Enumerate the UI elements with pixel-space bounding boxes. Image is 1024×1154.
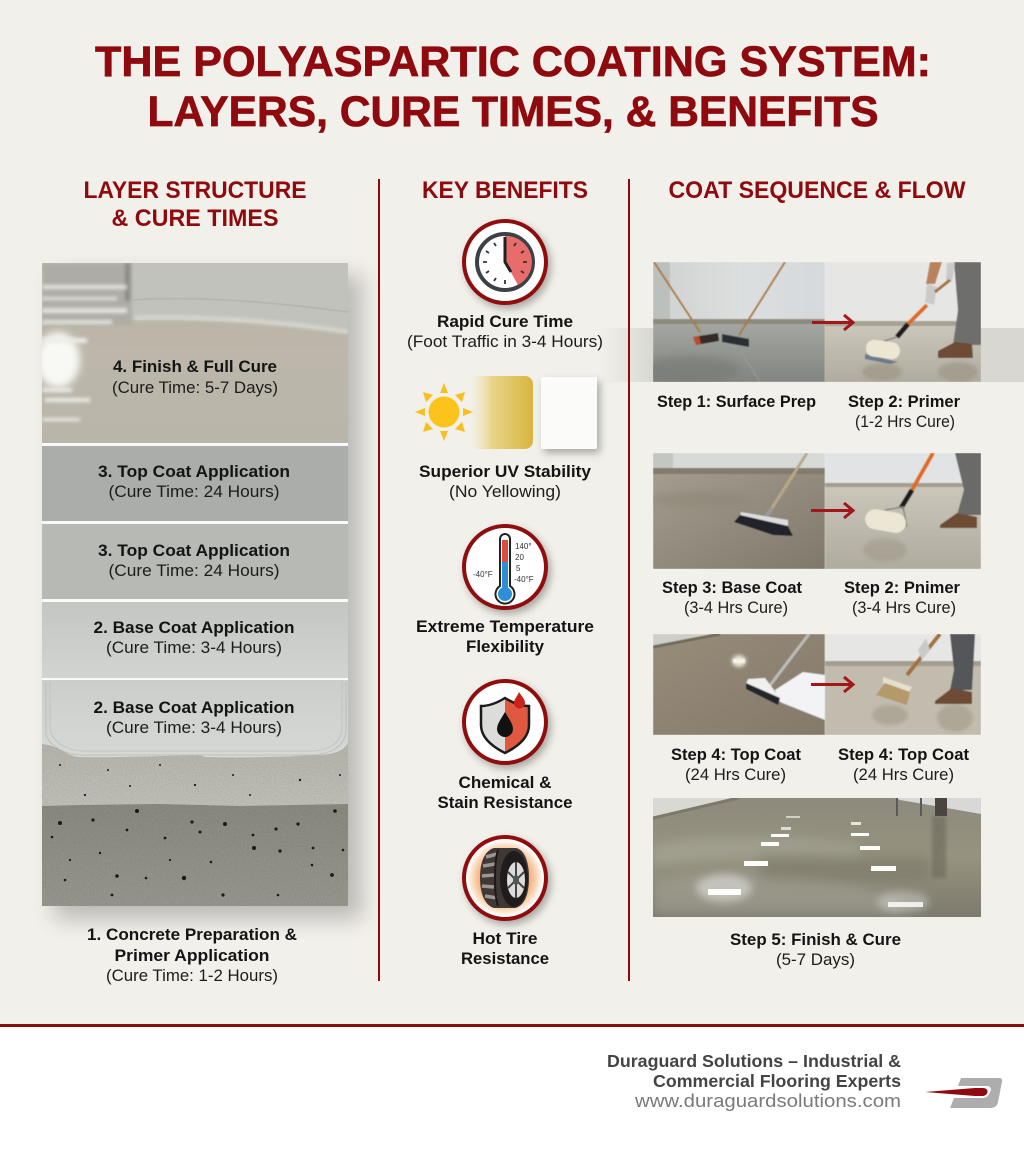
photo: base coat (650, 453, 825, 569)
icon: thermometer: 5 (516, 564, 521, 573)
caption: step 4 left (671, 745, 801, 784)
text: rapid cure: Rapid Cure Time (437, 312, 573, 331)
title: THE POLYASPARTIC COATING SYSTEM: (95, 38, 931, 86)
icon: chemical shield (464, 681, 546, 763)
arrow 2 (811, 503, 853, 518)
caption: step 4 right: (24 Hrs Cure) (853, 766, 954, 784)
text: rapid cure (407, 312, 603, 351)
caption: step 2 primer: Step 2: Primer (848, 392, 960, 411)
caption: step 2 repeat: (3-4 Hrs Cure) (852, 599, 956, 617)
label: top coat lower: (Cure Time: 24 Hours) (108, 562, 280, 580)
rough concrete (42, 804, 348, 906)
caption: step 2 repeat: Step 2: Pnimer (844, 578, 960, 597)
heading: layer structure: & CURE TIMES (112, 205, 278, 232)
label: top coat upper: 3. Top Coat Application (98, 462, 290, 481)
text: hot tire: Hot Tire (472, 929, 538, 948)
arrow 1 (812, 315, 853, 330)
text: temperature (416, 617, 594, 656)
photo: finish and cure (653, 798, 981, 917)
layer 2 base coat upper (42, 602, 348, 678)
caption: step 4 left: Step 4: Top Coat (671, 745, 801, 764)
icon: thermometer: 140° (515, 542, 532, 551)
footer text: Commercial Flooring Experts (653, 1071, 901, 1091)
text: temperature: Flexibility (466, 637, 545, 656)
translucent band behind the first photo row (600, 328, 1024, 382)
icon: clock (464, 221, 546, 303)
label: finish layer: (Cure Time: 5-7 Days) (112, 379, 278, 397)
text: temperature: Extreme Temperature (416, 617, 594, 636)
label: base coat lower: 2. Base Coat Application (94, 698, 294, 717)
icon: sun and UV swatches (415, 376, 597, 449)
caption: step 3: Step 3: Base Coat (662, 578, 802, 597)
caption: step 2 repeat (844, 578, 960, 617)
caption: step 4 right: Step 4: Top Coat (838, 745, 969, 764)
caption: step 1: Step 1: Surface Prep (657, 392, 816, 411)
label: top coat lower (98, 541, 290, 580)
concrete primer layer (42, 740, 348, 806)
photo: top coat brush (825, 634, 981, 735)
label: concrete preparation (87, 925, 297, 985)
caption: step 4 right (838, 745, 969, 784)
caption: step 3: (3-4 Hrs Cure) (684, 599, 788, 617)
layer 3 top coat lower (42, 524, 348, 599)
icon: hot tire (464, 837, 546, 919)
panel: layer stack (36, 263, 362, 919)
label: concrete preparation: Primer Application (114, 946, 270, 965)
text: UV stability (419, 462, 592, 501)
caption: step 4 left: (24 Hrs Cure) (685, 766, 786, 784)
layer 4 finish photo (36, 263, 348, 443)
text: rapid cure: (Foot Traffic in 3-4 Hours) (407, 333, 603, 351)
text: hot tire: Resistance (461, 949, 549, 968)
concrete speckles (51, 764, 344, 897)
label: concrete preparation: 1. Concrete Preparation & (87, 925, 297, 944)
caption: step 2 primer: (1-2 Hrs Cure) (855, 413, 955, 431)
icon: thermometer: -40°F (473, 570, 493, 579)
title: LAYERS, CURE TIMES, & BENEFITS (148, 88, 878, 136)
label: base coat upper: (Cure Time: 3-4 Hours) (106, 639, 282, 657)
label: top coat upper (98, 462, 290, 501)
photo: primer roller 2 (825, 453, 981, 569)
label: finish layer (112, 357, 278, 397)
layer 2 base coat lower (42, 680, 348, 757)
footer text (607, 1051, 901, 1111)
label: base coat lower: (Cure Time: 3-4 Hours) (106, 719, 282, 737)
icon: thermometer: -40°F (514, 575, 534, 584)
icon: thermometer (464, 526, 546, 608)
photo: top coat squeegee (653, 634, 825, 735)
footer text: Duraguard Solutions – Industrial & (607, 1051, 901, 1071)
logo (925, 1078, 1002, 1108)
footer band (0, 1024, 1024, 1154)
text: chemical (438, 773, 572, 812)
label: base coat upper (94, 618, 294, 657)
label: finish layer: 4. Finish & Full Cure (113, 357, 277, 376)
caption: step 5: Step 5: Finish & Cure (730, 930, 901, 949)
photo row 3 (653, 634, 981, 735)
label: top coat upper: (Cure Time: 24 Hours) (108, 483, 280, 501)
text: UV stability: Superior UV Stability (419, 462, 592, 481)
label: concrete preparation: (Cure Time: 1-2 Hours) (106, 967, 278, 985)
photo: surface prep (640, 262, 825, 384)
caption: step 3 (662, 578, 802, 617)
heading: layer structure (84, 177, 306, 232)
heading: coat sequence: COAT SEQUENCE & FLOW (668, 177, 966, 204)
text: chemical: Chemical & (458, 773, 552, 792)
icon: thermometer: 20 (515, 553, 524, 562)
layer 3 top coat upper (42, 446, 348, 521)
arrow 3 (811, 677, 853, 692)
label: base coat lower (94, 698, 294, 737)
text: UV stability: (No Yellowing) (449, 483, 561, 501)
caption: step 5: (5-7 Days) (776, 951, 855, 969)
caption: step 2 primer (848, 392, 960, 431)
label: base coat upper: 2. Base Coat Application (94, 618, 294, 637)
heading: layer structure: LAYER STRUCTURE (84, 177, 306, 204)
photo row 2 (650, 453, 981, 569)
caption: step 5 (730, 930, 901, 969)
heading: key benefits: KEY BENEFITS (422, 177, 588, 204)
footer text: www.duraguardsolutions.com (634, 1091, 901, 1111)
text: chemical: Stain Resistance (438, 793, 572, 812)
label: top coat lower: 3. Top Coat Application (98, 541, 290, 560)
photo: primer roller (825, 262, 981, 382)
photo row 1 (640, 262, 981, 384)
title (95, 38, 931, 136)
text: hot tire (461, 929, 549, 968)
